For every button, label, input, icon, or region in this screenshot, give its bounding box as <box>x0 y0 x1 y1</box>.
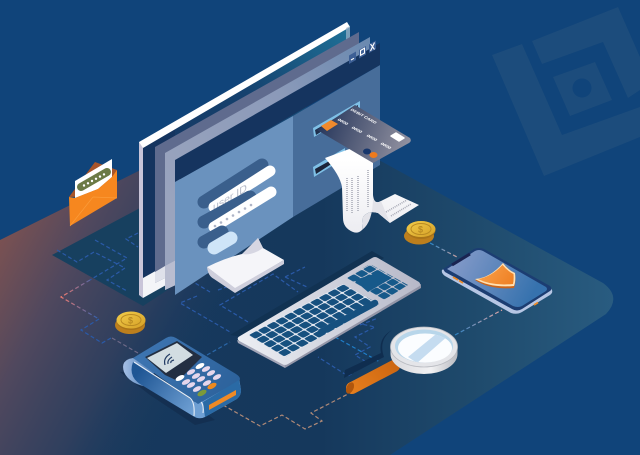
shield icon <box>475 263 515 288</box>
watermark logo <box>492 7 640 176</box>
third window layer <box>165 37 370 290</box>
card slot top <box>313 101 360 137</box>
lens glass <box>395 330 453 362</box>
payment pane <box>293 65 380 217</box>
screen <box>147 343 193 373</box>
dashed link: coin to POS <box>112 338 138 353</box>
user id field: user ID <box>213 182 247 214</box>
POS terminal <box>123 336 241 418</box>
POS shadow <box>120 370 215 425</box>
body top <box>133 336 240 404</box>
password pill <box>81 172 107 187</box>
left coin: $ <box>128 316 133 326</box>
monitor <box>139 22 419 298</box>
chip <box>321 120 338 131</box>
contactless icon <box>165 354 174 365</box>
dashed link: red fade <box>61 280 99 319</box>
monitor chin <box>143 260 175 298</box>
body side <box>132 362 241 418</box>
main keys <box>248 284 379 357</box>
title bar <box>175 43 380 182</box>
monitor back frame <box>143 25 350 278</box>
lens rim <box>390 334 458 374</box>
card slot bottom <box>313 148 345 177</box>
left coin <box>115 312 146 334</box>
keyboard shadow <box>230 251 384 338</box>
number pad <box>346 264 408 300</box>
dashed link: POS to magnifier <box>223 394 348 429</box>
bank card: 0000 <box>365 134 379 142</box>
function keys <box>196 381 218 398</box>
magnifier <box>344 327 458 395</box>
card reader slot <box>209 390 236 410</box>
bank card: 0000 <box>379 142 393 150</box>
shadow <box>344 330 392 378</box>
right coin <box>404 221 436 244</box>
side buttons <box>453 277 538 305</box>
handle <box>352 366 394 388</box>
dashed circuit lines <box>57 233 380 376</box>
phone notch <box>452 254 470 265</box>
envelope icon <box>69 159 117 226</box>
monitor side edge <box>139 142 143 298</box>
phone screen <box>447 250 547 307</box>
letter <box>75 159 112 198</box>
receipt <box>325 148 419 233</box>
keyboard <box>237 257 421 368</box>
keypad <box>175 362 222 393</box>
space bar <box>321 303 375 332</box>
isometric floor <box>0 103 613 455</box>
number pad large key <box>354 272 392 292</box>
window buttons <box>349 40 376 64</box>
screen bezel <box>145 341 202 381</box>
signature strip <box>391 133 404 141</box>
second window layer <box>155 32 359 283</box>
card logo <box>363 148 378 158</box>
bank card: 0000 <box>350 126 364 134</box>
smartphone <box>442 248 552 314</box>
right face <box>203 380 241 417</box>
paper roll <box>123 358 155 386</box>
bank card: 0000 <box>336 118 350 126</box>
submit button <box>214 238 231 248</box>
monitor stand <box>207 238 284 293</box>
dashed link: coin to phone <box>430 243 457 257</box>
monitor top edge <box>139 22 350 148</box>
right coin: $ <box>418 224 423 234</box>
bank card <box>317 105 411 163</box>
dashed link: magnifier to phone <box>455 310 502 335</box>
bank card: DEBIT CARD <box>349 108 378 124</box>
password field <box>214 192 271 227</box>
login form <box>204 165 271 248</box>
floor shadow panel <box>52 190 175 306</box>
login pane <box>175 116 293 295</box>
